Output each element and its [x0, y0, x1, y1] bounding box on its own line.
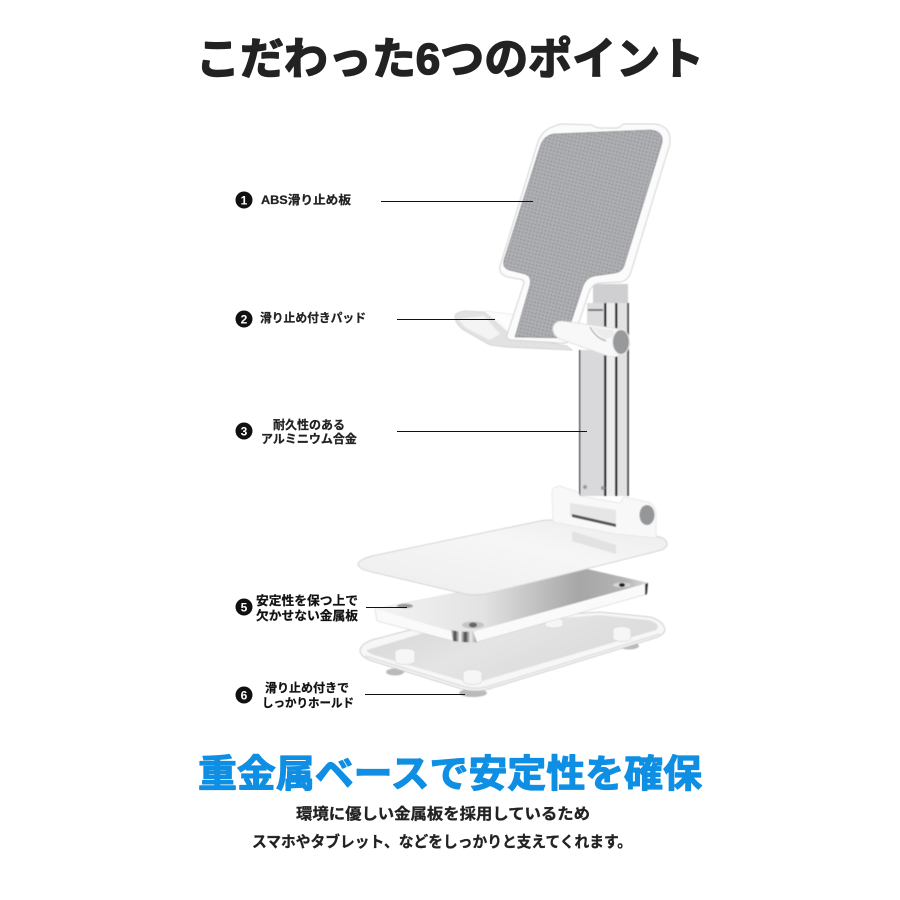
callout 1: ABS plate — [236, 192, 533, 208]
callout 6: feet — [236, 680, 465, 710]
callout 5: metal plate: 欠かせない金属板 — [256, 608, 358, 623]
left foot of holder — [455, 311, 572, 350]
callout 5: metal plate — [236, 593, 407, 623]
callout 3: aluminium: 3 — [241, 424, 248, 438]
right hinge cylinder — [553, 321, 630, 357]
callout 6: feet: しっかりホールド — [262, 696, 354, 710]
callout 3: aluminium: 耐久性のある — [273, 417, 345, 432]
heading: blue: 重金属ベースで安定性を確保 — [198, 754, 702, 796]
callout 2: pad: 2 — [241, 312, 248, 326]
metal plate — [375, 568, 648, 642]
body text: スマホやタブレット、などをしっかりと支えてくれます。 — [252, 832, 632, 851]
callout 5: metal plate: 安定性を保つ上で — [256, 593, 358, 608]
illustration: phone stand — [358, 124, 670, 697]
callout 6: feet: 6 — [241, 688, 248, 702]
base hinge — [552, 486, 656, 538]
callout 2: pad: 滑り止め付きパッド — [260, 310, 366, 325]
phone plate — [500, 124, 670, 343]
tray posts — [395, 618, 631, 685]
aluminium pole — [579, 284, 629, 496]
body text — [252, 804, 632, 851]
top base plate — [358, 520, 667, 595]
bottom tray — [360, 612, 665, 691]
rubber feet — [386, 642, 639, 697]
callout 5: metal plate: 5 — [241, 600, 248, 614]
callout 3: aluminium: アルミニウム合金 — [261, 431, 357, 446]
body text: 環境に優しい金属板を採用しているため — [296, 804, 590, 823]
callout 2: pad — [236, 310, 495, 328]
callout 3: aluminium — [236, 417, 587, 446]
callout 1: ABS plate: ABS滑り止め板 — [261, 192, 351, 207]
callout 1: ABS plate: 1 — [241, 194, 248, 208]
title: こだわった6つのポイント — [196, 35, 704, 84]
callout 6: feet: 滑り止め付きで — [265, 680, 349, 695]
